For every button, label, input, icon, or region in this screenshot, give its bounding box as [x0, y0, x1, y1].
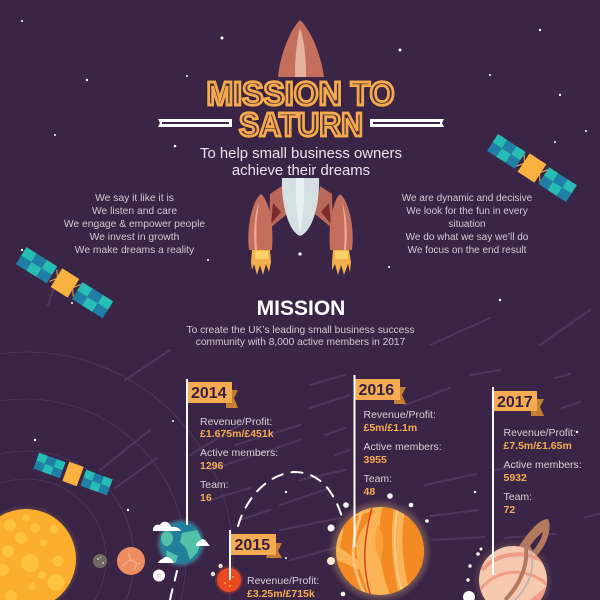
satellite: lower left — [33, 451, 113, 497]
subtitle: To help small business owners — [200, 146, 402, 162]
mission text: To create the UK’s leading small business success — [186, 325, 415, 336]
flag 2017: 2017 — [497, 394, 533, 411]
stats 2017: £7.5m/£1.65m — [504, 440, 572, 452]
values: left: We engage & empower people — [64, 219, 205, 230]
values: right: We look for the fun in every — [406, 206, 528, 217]
milestone 2015 — [229, 530, 319, 600]
values: left: We say it like it is — [95, 193, 174, 204]
values: right — [402, 193, 533, 256]
milestone 2017 — [492, 387, 582, 575]
title: MISSION TO — [206, 75, 394, 112]
values: right: We are dynamic and decisive — [402, 193, 533, 204]
title: SATURN — [239, 106, 363, 143]
rocket fins — [269, 186, 333, 229]
stats 2016: £5m/£1.1m — [364, 422, 417, 434]
values: left: We invest in growth — [90, 232, 180, 243]
values: left — [64, 193, 205, 256]
right booster — [330, 194, 353, 275]
title: SATURN — [239, 106, 363, 143]
satellite: top right — [487, 133, 577, 203]
rocket nose — [278, 20, 324, 77]
stats 2017 — [504, 427, 582, 516]
stats 2014: Team: — [200, 479, 229, 491]
saturn moons — [463, 548, 482, 600]
white moon — [153, 570, 165, 582]
stats 2016: Active members: — [364, 441, 442, 453]
jupiter moons — [327, 493, 429, 596]
rocket — [248, 20, 353, 275]
stats 2017: Team: — [504, 491, 532, 503]
milestone 2014 — [186, 379, 278, 525]
stats 2015 — [247, 575, 319, 600]
satellite: left — [15, 246, 114, 319]
milestone 2016 — [354, 375, 442, 547]
mission heading: MISSION — [257, 297, 345, 320]
stats 2014: £1.675m/£451k — [200, 428, 274, 440]
values: left: We listen and care — [92, 206, 177, 217]
stats 2015: £3.25m/£715k — [247, 588, 315, 600]
stats 2017: Active members: — [504, 459, 582, 471]
stats 2014 — [200, 416, 278, 504]
stats 2016: Revenue/Profit: — [364, 409, 436, 421]
values: right: situation — [448, 219, 486, 230]
mission text — [186, 325, 415, 348]
flag 2015: 2015 — [234, 537, 270, 554]
stats 2014: 16 — [200, 492, 212, 504]
flag 2017 — [492, 387, 544, 575]
stats 2014: Revenue/Profit: — [200, 416, 272, 428]
ribbon: left — [158, 119, 232, 127]
title: MISSION TO — [206, 75, 394, 112]
stats 2017: Revenue/Profit: — [504, 427, 576, 439]
jupiter — [328, 499, 432, 600]
mission text: community with 8,000 active members in 2017 — [196, 337, 406, 348]
flag 2014: 2014 — [191, 385, 227, 402]
stats 2016: 48 — [364, 486, 375, 498]
values: right: We do what we say we’ll do — [406, 232, 529, 243]
subtitle: achieve their dreams — [232, 163, 370, 179]
light streaks — [48, 270, 600, 560]
stats 2016 — [364, 409, 442, 498]
flag 2016: 2016 — [358, 382, 394, 399]
stats 2017: 72 — [504, 504, 515, 516]
earth — [153, 518, 210, 568]
2015 planet — [211, 564, 242, 593]
stats 2015: Revenue/Profit: — [247, 575, 319, 587]
stats 2014: 1296 — [200, 460, 224, 472]
flag 2016 — [354, 375, 406, 547]
rocket body — [282, 178, 319, 236]
stats 2014: Active members: — [200, 447, 278, 459]
orbit rings — [0, 352, 233, 600]
saturn — [473, 519, 553, 600]
title — [206, 75, 394, 143]
small moon — [93, 554, 107, 568]
stats 2016: Team: — [364, 473, 392, 485]
ribbon: right — [370, 119, 444, 127]
sun — [0, 505, 80, 600]
stats 2016: 3955 — [364, 454, 387, 466]
mars — [117, 547, 145, 575]
subtitle — [200, 146, 402, 179]
values: right: We focus on the end result — [408, 245, 527, 256]
flag 2014 — [186, 379, 238, 525]
stats 2017: 5932 — [504, 472, 527, 484]
dashed flight path — [170, 472, 342, 600]
left booster — [248, 194, 272, 275]
values: left: We make dreams a reality — [75, 245, 195, 256]
